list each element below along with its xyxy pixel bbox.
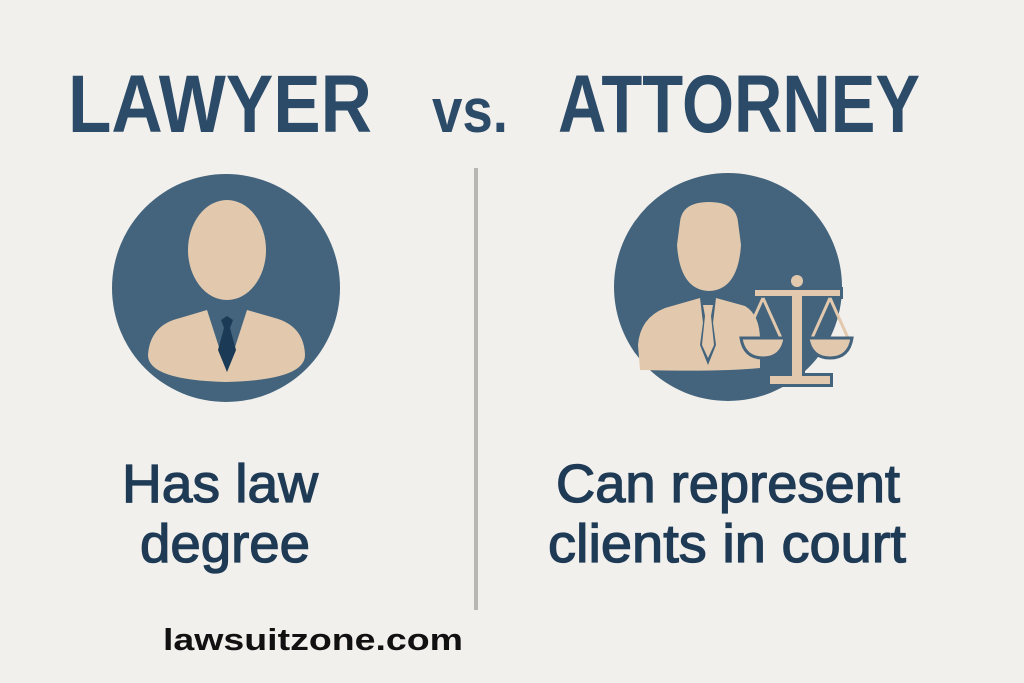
footer: website: lawsuitzone.com [163,622,463,657]
title: vs. [432,77,508,146]
title [68,59,920,150]
divider [474,168,478,610]
text: lawyer description: Has law [122,454,319,514]
icon: attorney with scales [614,173,852,401]
icon: lawyer [112,174,340,402]
text: lawyer description [122,454,319,574]
scales [755,275,840,384]
text: lawyer description: degree [140,514,310,574]
text: attorney description: clients in court [548,514,906,574]
title: ATTORNEY [558,59,920,150]
text: attorney description: Can represent [556,454,900,514]
text: attorney description [548,454,906,574]
title: LAWYER [68,59,372,150]
